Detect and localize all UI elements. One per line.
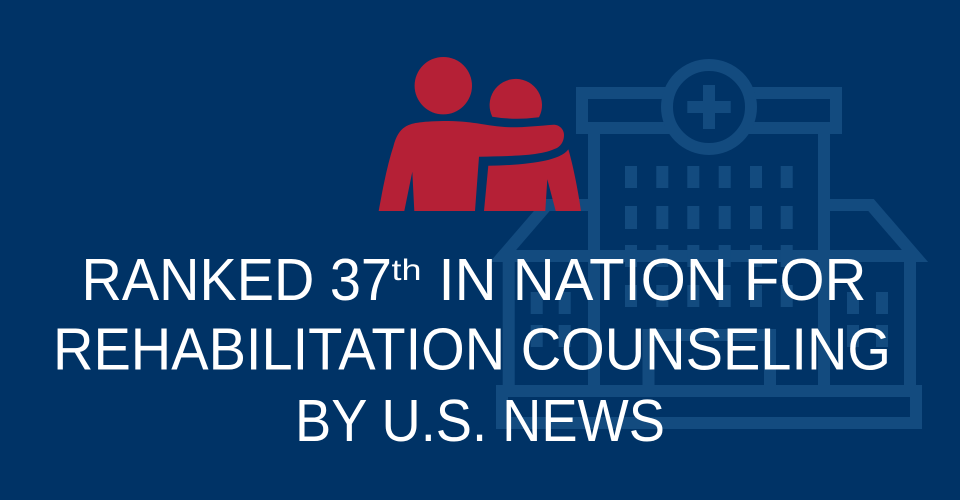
line 1: RANKED 37 xyxy=(82,247,392,313)
line 1: IN NATION FOR xyxy=(438,247,866,313)
large person head xyxy=(415,57,472,114)
icon: two people embracing xyxy=(379,57,581,211)
line 1: th xyxy=(392,254,422,287)
hospital wing walls xyxy=(509,262,910,385)
hospital central tower walls xyxy=(594,134,824,385)
hospital base xyxy=(502,391,916,423)
line 2: REHABILITATION COUNSELING xyxy=(53,316,891,382)
line 1 xyxy=(82,247,866,313)
small person body xyxy=(484,149,581,211)
heading: ranking text xyxy=(53,247,891,454)
icon: medical cross xyxy=(687,85,731,129)
hospital circle emblem xyxy=(667,65,751,149)
hospital door frame xyxy=(648,335,770,385)
line 3: BY U.S. NEWS xyxy=(295,388,665,454)
hospital side wing roofs xyxy=(503,205,915,256)
hospital top sign bar xyxy=(582,93,836,128)
small person head xyxy=(490,79,542,119)
large person body with arm xyxy=(379,121,564,211)
icon: hospital building xyxy=(502,65,916,423)
hospital windows xyxy=(531,166,888,347)
